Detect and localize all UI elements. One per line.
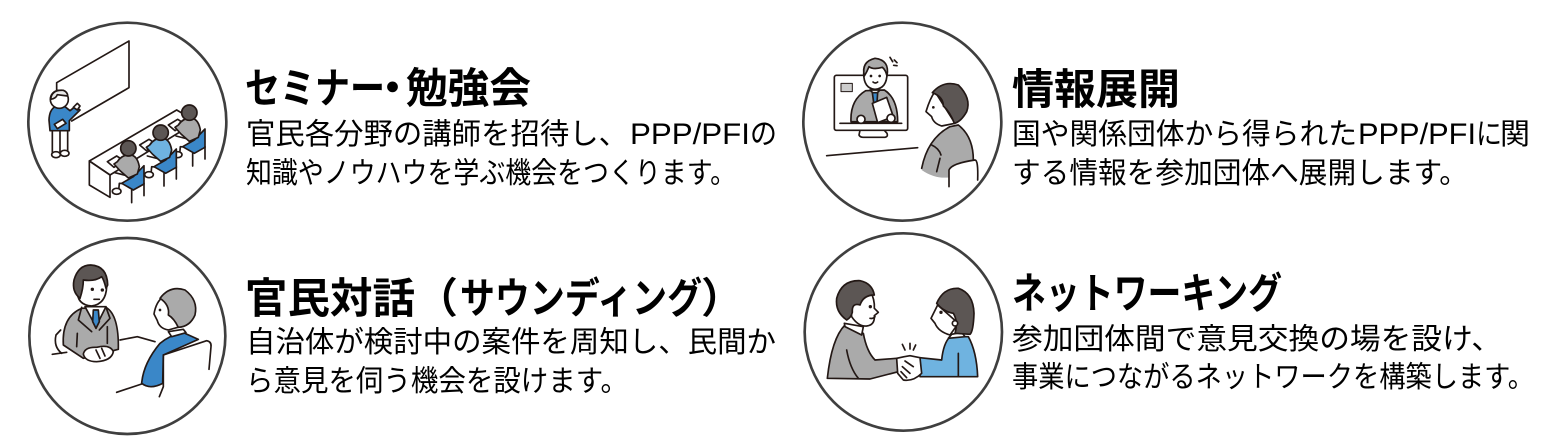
icon: seminar classroom bbox=[28, 23, 226, 221]
panel: networking bbox=[805, 233, 1534, 431]
text: seminar description: 知識やノウハウを学ぶ機会をつくります。 bbox=[246, 157, 736, 190]
text: information description: 関 bbox=[1500, 118, 1530, 151]
text: information description: する情報を参加団体へ展開します。 bbox=[1012, 157, 1468, 190]
panel: information bbox=[803, 23, 1530, 221]
heading: seminar: ・ bbox=[372, 65, 414, 112]
heading: seminar: 勉強会 bbox=[406, 65, 531, 112]
text: seminar description bbox=[246, 118, 777, 190]
text: dialogue description bbox=[246, 326, 776, 398]
heading: dialogue: ） bbox=[701, 275, 743, 322]
text: seminar description: 官民各分野の講師を招待し、 bbox=[246, 118, 628, 151]
heading: information: 情報展開 bbox=[1012, 66, 1180, 113]
icon: online information session bbox=[803, 23, 1001, 221]
icon: handshake bbox=[805, 233, 1002, 431]
text: dialogue description: 自治体が検討中の案件を周知し、民間か bbox=[246, 326, 776, 359]
text: information description: 国や関係団体から得られた bbox=[1012, 118, 1357, 151]
text: networking description bbox=[1012, 323, 1534, 394]
text: information description: PPP/PFI bbox=[1358, 118, 1476, 151]
heading: seminar: セミナー bbox=[245, 65, 385, 112]
icon: two people in dialogue bbox=[29, 238, 225, 434]
text: information description bbox=[1012, 118, 1530, 190]
panel: seminar bbox=[28, 23, 777, 221]
heading: seminar bbox=[245, 65, 531, 112]
panel: dialogue bbox=[29, 238, 776, 434]
text: dialogue description: ら意見を伺う機会を設けます。 bbox=[246, 365, 628, 398]
heading: networking: ネットワーキング bbox=[1012, 270, 1282, 317]
text: seminar description: PPP/PFI bbox=[630, 118, 750, 151]
heading: dialogue: 官民対話 bbox=[245, 275, 415, 322]
heading: dialogue: （ bbox=[416, 275, 458, 322]
text: networking description: 参加団体間で意見交換の場を設け、 bbox=[1012, 323, 1502, 356]
heading: dialogue bbox=[245, 275, 743, 322]
text: information description: に bbox=[1476, 118, 1502, 151]
text: seminar description: の bbox=[750, 118, 777, 151]
heading: dialogue: サウンディング bbox=[460, 275, 702, 322]
